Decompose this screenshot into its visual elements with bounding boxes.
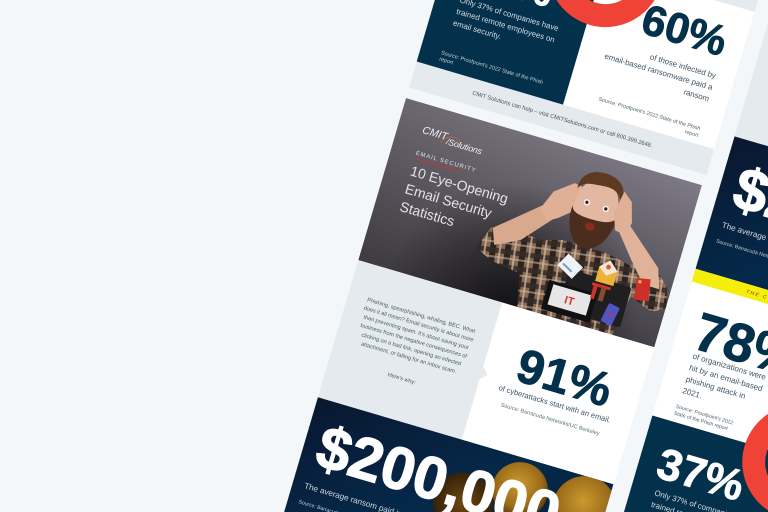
- text: eyebrow: EMAIL SECURITY: [415, 151, 477, 174]
- text: intro paragraph: business from the negative consequences of: [360, 323, 468, 360]
- head: [574, 184, 618, 222]
- text: 60% description: of those infected by: [649, 52, 717, 80]
- text: footer contact: CMIT Solutions can help – visit CMITSolutions.com or call 800.399.2648.: [471, 91, 653, 149]
- left column top: stats section: [409, 0, 768, 175]
- eyes: [584, 199, 609, 212]
- text: 37% source: Source: Proofpoint's 2022 State of the Phish: [440, 50, 544, 86]
- divider: red rule: [414, 158, 461, 173]
- mouth: [584, 222, 594, 231]
- right hand: [614, 192, 632, 232]
- text: 60% source: report: [684, 129, 699, 139]
- text: intro paragraph: does it all mean? Email security is about more: [363, 306, 474, 344]
- icon: red ring repeat: [742, 404, 768, 512]
- coins: [433, 462, 612, 512]
- text: 78% source: State of the Phish report: [673, 411, 729, 432]
- torso: [517, 240, 631, 335]
- panel: 37% dark: [417, 0, 604, 105]
- red IT mark: [590, 282, 611, 302]
- left hand: [542, 183, 582, 220]
- text: 91% source: Source: Barracuda Networks/UC Berkeley: [500, 402, 600, 437]
- logo: CMIT Solutions: CMIT: [421, 124, 450, 143]
- logo: CMIT Solutions: /Solutions: [444, 136, 484, 157]
- tablet: [565, 272, 631, 327]
- text: 60% source: Source: Proofpoint's 2022 State of the Phish: [598, 97, 701, 132]
- text: 37% source: report: [438, 56, 454, 66]
- credit card: [634, 278, 651, 301]
- text: 60% description: ransom: [683, 87, 711, 104]
- banner: yellow: [692, 269, 768, 369]
- right column: [611, 0, 768, 512]
- heading: Statistics: [398, 198, 456, 229]
- panel: 37% dark repeat: [611, 374, 768, 512]
- heading: 10 Eye-Opening: [409, 163, 510, 207]
- text: 37% description: email security.: [452, 18, 502, 41]
- text: 78% description: 2021.: [681, 386, 703, 400]
- infographic mockup: two rotated columns: [284, 0, 768, 512]
- photo: surprised man: [476, 172, 668, 335]
- text: 60% description: email-based ransomware paid a: [603, 52, 714, 92]
- laptop: IT: [563, 294, 576, 309]
- text: here's why: Here's why:: [387, 372, 417, 386]
- document card: [557, 253, 583, 279]
- phone: [600, 303, 620, 326]
- phone: IT: [606, 312, 613, 320]
- panel: intro grey: [318, 260, 508, 441]
- right sleeve: [630, 264, 668, 312]
- text: intro paragraph: clicking on a bad link, opening an infected: [361, 332, 462, 367]
- pupils: [585, 200, 608, 211]
- beard: [569, 206, 615, 248]
- stat: 37% repeat: 37%: [651, 439, 750, 511]
- text: 78% description: of organizations were: [692, 352, 768, 382]
- left sleeve: [476, 227, 540, 272]
- stat: 91%: 91%: [511, 340, 618, 418]
- panel: navy ransom repeat: [696, 136, 768, 356]
- icon: red ring: [548, 0, 663, 27]
- text: intro paragraph: attachment, or falling for an inbox scam.: [360, 341, 457, 375]
- panel: $200,000 ransom: [279, 396, 624, 512]
- panel: 60% white: [563, 0, 754, 149]
- text: 78% description: hit by an email-based: [688, 363, 764, 393]
- text: intro paragraph: Phishing, spearphishing, whaling, BEC. What: [366, 297, 476, 335]
- text: 37% description: trained remote employees on: [455, 7, 556, 44]
- heading: Email Security: [403, 180, 494, 221]
- panel: 78% white: [652, 282, 768, 503]
- panel: hero banner: [357, 98, 702, 350]
- logo: CMIT Solutions: [423, 127, 482, 154]
- text: intro paragraph: than preventing spam. It's about saving your: [363, 315, 470, 351]
- laptop: [541, 280, 597, 323]
- text: 78% description: phishing attack in: [685, 375, 747, 401]
- text: 78% source: Source: Proofpoint's 2022: [675, 404, 734, 426]
- text: 91% description: of cyberattacks start with an email.: [498, 383, 612, 425]
- envelope: [595, 260, 618, 286]
- right forearm: [619, 226, 660, 290]
- left forearm: [492, 205, 554, 245]
- hair: [578, 172, 624, 200]
- panel: 91% white: [462, 302, 654, 485]
